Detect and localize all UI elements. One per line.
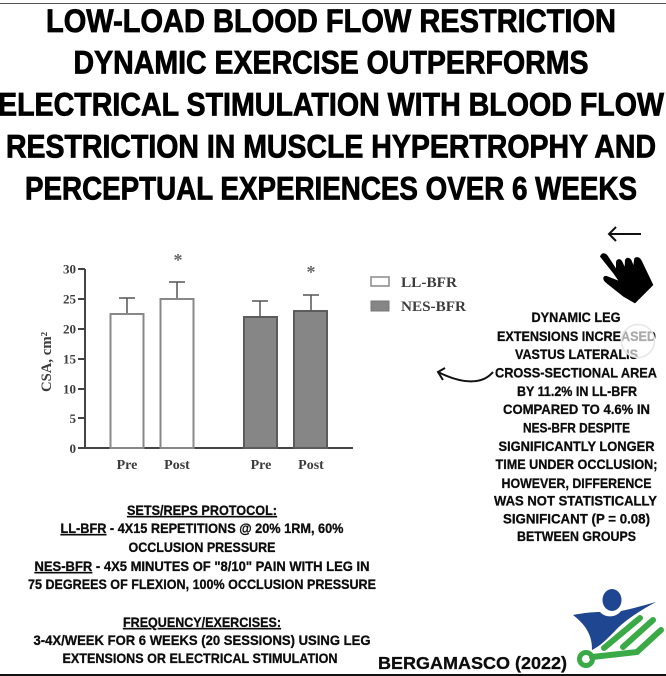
significance stars: [174, 250, 316, 282]
bar: NES-BFR post: [294, 295, 327, 448]
bottom rule: [0, 674, 666, 676]
y tick labels: 5: [70, 411, 76, 426]
y tick labels: 30: [63, 262, 76, 276]
x axis labels: Post: [298, 458, 324, 473]
icon: pointing hand: [600, 253, 653, 303]
title: LOW-LOAD BLOOD FLOW RESTRICTION: [46, 3, 616, 39]
bar: LL-BFR post: [160, 282, 194, 448]
callout: results text: VASTUS LATERALIS: [515, 346, 638, 362]
icon: left arrow: [609, 227, 641, 241]
bar chart: [39, 250, 353, 473]
text block: frequency/exercises: FREQUENCY/EXERCISES:: [123, 614, 281, 630]
y tick labels: 20: [63, 322, 76, 336]
chart legend: NES-BFR: [401, 299, 467, 315]
y tick labels: 0: [70, 441, 76, 456]
text block: frequency/exercises: EXTENSIONS OR ELECTRICAL STIMULATION: [62, 650, 338, 666]
title: [0, 3, 665, 206]
icon: curved arrow: [438, 368, 493, 381]
x axis labels: [117, 458, 324, 473]
y tick labels: 25: [63, 292, 76, 306]
watermark circle: [622, 324, 654, 358]
significance stars: *: [306, 262, 316, 282]
callout: results text: NES-BFR DESPITE: [523, 420, 630, 436]
callout: results text: SIGNIFICANT (P = 0.08): [503, 510, 650, 526]
callout: results text: BY 11.2% IN LL-BFR: [517, 383, 637, 399]
callout: results text: SIGNIFICANTLY LONGER: [498, 438, 654, 454]
bar: LL-BFR pre: [110, 298, 144, 448]
callout: results text: WAS NOT STATISTICALLY: [494, 492, 658, 508]
y tick labels: [63, 262, 76, 456]
callout: results text: DYNAMIC LEG: [532, 309, 621, 325]
bar: NES-BFR pre: [244, 301, 277, 448]
text block: frequency/exercises: 3-4X/WEEK FOR 6 WEEKS (20 SESSIONS) USING LEG: [34, 632, 371, 648]
y tick labels: 15: [63, 352, 76, 366]
x axis labels: Pre: [117, 458, 137, 473]
text block: sets/reps protocol: [28, 502, 376, 592]
y axis label: CSA, cm²: [39, 332, 55, 392]
x axis labels: Post: [164, 458, 190, 473]
text block: sets/reps protocol: SETS/REPS PROTOCOL:: [127, 502, 277, 518]
text block: frequency/exercises: [34, 614, 371, 666]
x axis labels: Pre: [251, 458, 271, 473]
callout: results text: HOWEVER, DIFFERENCE: [502, 475, 652, 491]
chart legend: LL-BFR: [401, 275, 458, 291]
y axis: [78, 269, 353, 449]
callout: results text: COMPARED TO 4.6% IN: [503, 401, 650, 417]
text block: sets/reps protocol: 75 DEGREES OF FLEXION, 100% OCCLUSION PRESSURE: [28, 576, 376, 592]
significance stars: *: [174, 250, 182, 270]
text block: sets/reps protocol: NES-BFR - 4X5 MINUTES OF "8/10" PAIN WITH LEG IN: [34, 558, 370, 574]
y tick labels: 10: [63, 382, 76, 396]
callout: results text: BETWEEN GROUPS: [517, 528, 636, 544]
text block: sets/reps protocol: LL-BFR - 4X15 REPETITIONS @ 20% 1RM, 60%: [60, 520, 344, 536]
text block: sets/reps protocol: OCCLUSION PRESSURE: [128, 539, 276, 555]
callout: results text: [494, 309, 658, 544]
chart legend: [371, 275, 467, 315]
title: DYNAMIC EXERCISE OUTPERFORMS: [74, 44, 588, 80]
logo: [573, 589, 661, 666]
citation: BERGAMASCO (2022): [378, 653, 567, 673]
